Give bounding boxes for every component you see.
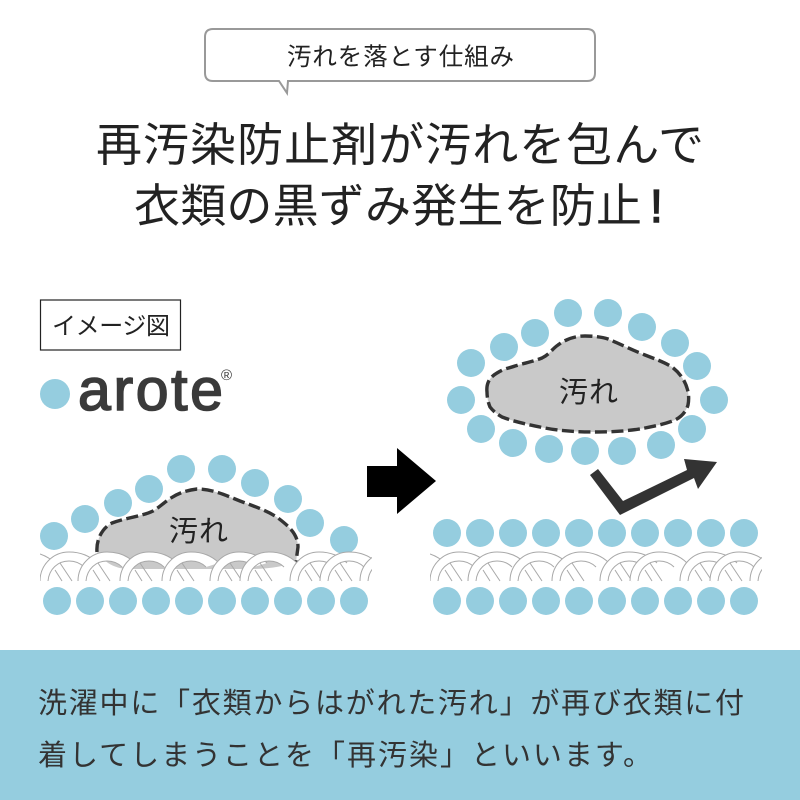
arrow: bounce up bbox=[590, 459, 717, 515]
title: 衣類の黒ずみ発生を防止 bbox=[134, 180, 642, 232]
fabric fibres left bbox=[40, 552, 417, 581]
diagram: dirt lifted from fabric bbox=[430, 299, 800, 615]
dirt blob left bbox=[97, 489, 298, 569]
dirt blob right bbox=[487, 336, 689, 432]
logo: arote: arote bbox=[78, 357, 223, 423]
dirt blob right: 汚れ bbox=[559, 376, 618, 409]
particles top row right bbox=[433, 519, 758, 547]
diagram: dirt on fabric with arote particles bbox=[40, 455, 417, 615]
title: ! bbox=[650, 180, 663, 232]
arrow: black right bbox=[367, 448, 436, 514]
dirt blob left: 汚れ bbox=[169, 515, 228, 548]
fabric fibres right bbox=[430, 552, 800, 581]
label: image figure bbox=[40, 300, 180, 350]
panel: explanation band: 洗濯中に「衣類からはがれた汚れ」が再び衣類に付 bbox=[38, 687, 744, 720]
panel: explanation band bbox=[0, 650, 800, 800]
logo: arote: ® bbox=[221, 367, 232, 384]
particles bottom row right bbox=[433, 587, 758, 615]
particles surrounding dirt left bbox=[40, 455, 358, 554]
label: image figure: イメージ図 bbox=[52, 313, 170, 340]
particles row left bbox=[43, 587, 368, 615]
callout: speech bubble heading bbox=[205, 29, 595, 93]
callout: speech bubble heading: 汚れを落とす仕組み bbox=[287, 43, 514, 71]
title: 再汚染防止剤が汚れを包んで bbox=[96, 119, 704, 171]
panel: explanation band: 着してしまうことを「再汚染」といいます。 bbox=[38, 739, 652, 772]
title bbox=[96, 119, 704, 232]
particles surrounding dirt right bbox=[447, 299, 728, 465]
